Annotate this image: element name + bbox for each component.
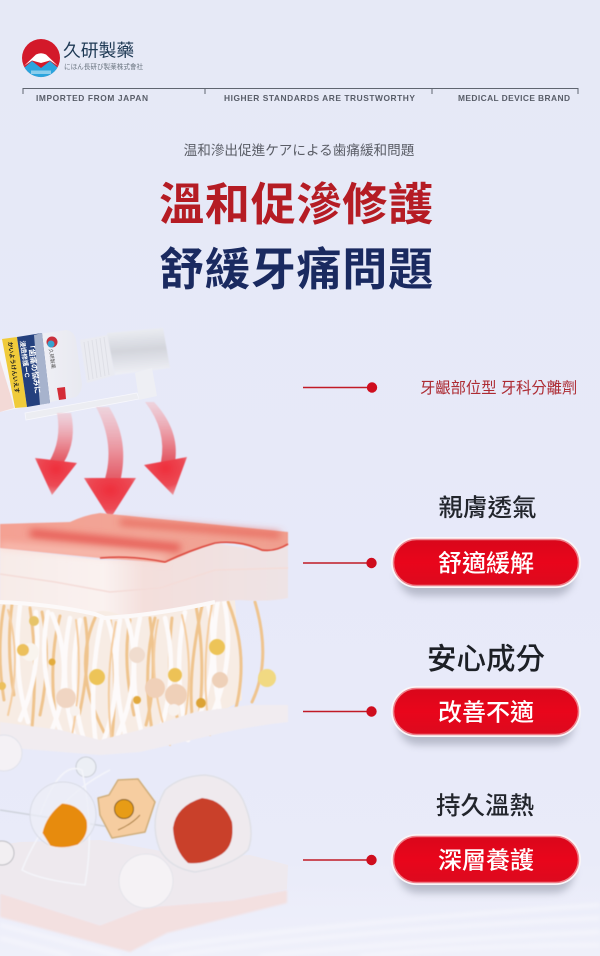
skin tissue block bbox=[0, 513, 288, 755]
lower base plate bbox=[0, 840, 288, 952]
arrow 3 bbox=[144, 402, 187, 495]
glass droplet bbox=[76, 757, 96, 777]
feature 2 connector bbox=[303, 706, 377, 717]
tissue fibers bbox=[0, 600, 263, 745]
feature 2 button: 改善不適 bbox=[438, 700, 534, 726]
red molecule bbox=[155, 775, 251, 872]
feature heading 3: 持久溫熱 bbox=[436, 792, 534, 820]
spray bottle: 久研製薬 bbox=[47, 348, 57, 369]
title line 1: 溫和促滲修護 bbox=[159, 179, 434, 230]
molecules bbox=[0, 735, 251, 908]
red top surface bbox=[0, 513, 288, 563]
upper base plate bbox=[0, 705, 288, 755]
fabric waves at the bottom bbox=[0, 905, 600, 956]
spray bottle: 浸透修護ーC bbox=[18, 340, 32, 378]
feature heading 2: 安心成分 bbox=[427, 643, 545, 676]
bottle brand mark bbox=[46, 336, 58, 348]
glass ball left edge bottom bbox=[0, 841, 14, 865]
slogan: imported: IMPORTED FROM JAPAN bbox=[36, 93, 148, 103]
icon: mountain logo bbox=[22, 39, 60, 77]
bottle red tag bbox=[57, 387, 66, 400]
connector: spray bbox=[303, 382, 377, 393]
peach molecule bbox=[98, 779, 155, 838]
bottle label text: 「歯痛の悩みに bbox=[26, 341, 43, 394]
feature heading 1: 親膚透氣 bbox=[438, 494, 536, 522]
feature 3 connector bbox=[303, 855, 377, 865]
orange molecule bbox=[30, 782, 96, 848]
feature 1 button bbox=[391, 537, 581, 596]
spray bottle bbox=[0, 328, 170, 420]
bottle body bbox=[0, 330, 82, 412]
clear ball bbox=[119, 854, 173, 908]
header bracket with slogans bbox=[23, 88, 578, 103]
arrow 2 bbox=[84, 407, 136, 519]
bottle collar bbox=[80, 335, 115, 383]
glass ball left edge top bbox=[0, 735, 22, 771]
bottle label yellow bbox=[2, 337, 27, 408]
nozzle arm bbox=[25, 393, 139, 420]
title line 2: 舒緩牙痛問題 bbox=[159, 244, 434, 295]
fiber backing bbox=[0, 600, 242, 745]
brand subtitle: にほん長研び製薬株式會社 bbox=[64, 62, 144, 71]
bottle label blue bbox=[17, 333, 50, 407]
feature 1 button: 舒適緩解 bbox=[438, 550, 534, 578]
spray bottle: かいようけんいえす bbox=[6, 341, 21, 394]
arrow 1 bbox=[35, 413, 77, 495]
white skin layers bbox=[0, 543, 288, 618]
feature 2 button bbox=[391, 686, 581, 745]
brand name: 久研製藥 bbox=[63, 40, 134, 60]
feature 3 button: 深層養護 bbox=[438, 848, 534, 874]
tissue bulbs bbox=[0, 616, 276, 716]
slogan: medical: MEDICAL DEVICE BRAND bbox=[458, 93, 570, 103]
bottle cap bbox=[107, 328, 170, 375]
subtitle: 温和滲出促進ケアによる歯痛緩和問題 bbox=[184, 142, 415, 158]
slogan: standards: HIGHER STANDARDS ARE TRUSTWORTHY bbox=[224, 93, 415, 103]
molecule rods bbox=[0, 810, 110, 827]
feature 1 connector bbox=[303, 558, 377, 568]
spray type label: 牙齦部位型 牙科分離劑 bbox=[420, 379, 577, 397]
logo bbox=[22, 39, 144, 77]
feature 3 button bbox=[391, 834, 581, 893]
